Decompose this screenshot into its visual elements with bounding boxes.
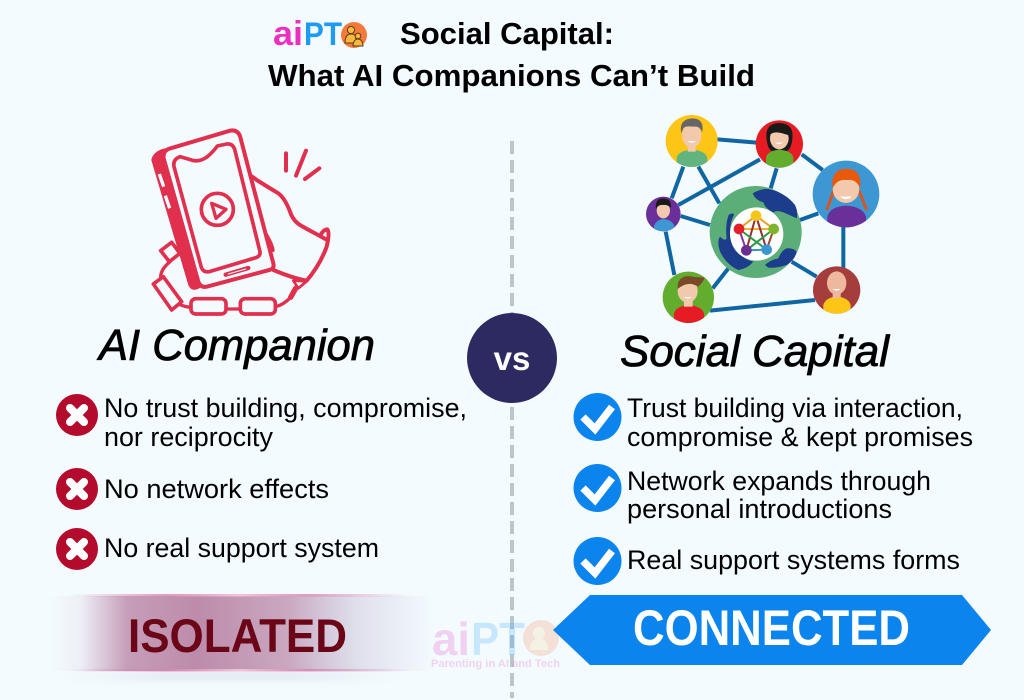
side buttons — [159, 174, 170, 208]
chain — [161, 262, 291, 309]
logo: aiPT — [273, 15, 367, 53]
person: red — [756, 120, 803, 168]
vs badge: vs — [494, 340, 530, 377]
banner: ISOLATED — [50, 594, 435, 680]
heading: AI Companion: AI Companion — [96, 321, 375, 370]
item 3 — [574, 537, 960, 585]
watermark logo — [431, 613, 560, 670]
item 2: No network effects — [104, 474, 329, 504]
item 2 — [56, 468, 329, 510]
banner: CONNECTED — [553, 595, 991, 665]
person: purple — [646, 197, 681, 233]
network diagram — [646, 115, 879, 325]
title — [268, 16, 755, 93]
title: What AI Companions Can’t Build — [268, 58, 755, 93]
item 2: personal introductions — [627, 494, 892, 524]
watermark logo: ai — [432, 613, 470, 665]
item 2: Network expands through — [627, 466, 931, 496]
globe — [710, 186, 802, 278]
phone side strip — [152, 149, 200, 289]
item 1: compromise & kept promises — [627, 422, 973, 452]
hand — [243, 174, 329, 281]
item 1 — [56, 393, 467, 452]
motion lines — [286, 151, 319, 179]
heading: Social Capital: Social Capital — [620, 327, 890, 376]
vs badge — [467, 313, 557, 403]
item 1: No trust building, compromise, — [104, 393, 467, 423]
person: blue — [813, 161, 879, 228]
icon: phone in chained hand — [152, 130, 329, 314]
banner: CONNECTED: CONNECTED — [633, 600, 910, 656]
phone home bar — [226, 268, 248, 275]
phone screen — [174, 144, 260, 272]
item 1: Trust building via interaction, — [627, 393, 963, 423]
person: green — [663, 272, 714, 325]
list: AI Companion drawbacks — [56, 393, 467, 570]
watermark logo: Parenting in AI and Tech — [431, 658, 560, 670]
item 1: nor reciprocity — [104, 422, 273, 452]
network links — [666, 139, 843, 311]
phone body — [164, 130, 274, 287]
item 3 — [56, 528, 379, 570]
play button — [201, 193, 233, 225]
banner: ISOLATED: ISOLATED — [128, 609, 347, 662]
item 3: No real support system — [104, 533, 379, 563]
item 3: Real support systems forms — [627, 545, 960, 575]
person: yellow — [666, 115, 718, 168]
wrist cuff — [293, 281, 307, 288]
item 2 — [574, 464, 931, 524]
item 1 — [574, 393, 973, 452]
list: Social Capital benefits — [574, 393, 973, 585]
person: brown — [813, 266, 860, 315]
watermark logo: PT — [471, 613, 525, 665]
logo: aiPT: ai — [273, 15, 303, 53]
finger edges — [247, 192, 273, 250]
title: Social Capital: — [400, 16, 614, 51]
logo: aiPT: PT — [304, 16, 342, 52]
center dashed divider — [510, 141, 514, 698]
